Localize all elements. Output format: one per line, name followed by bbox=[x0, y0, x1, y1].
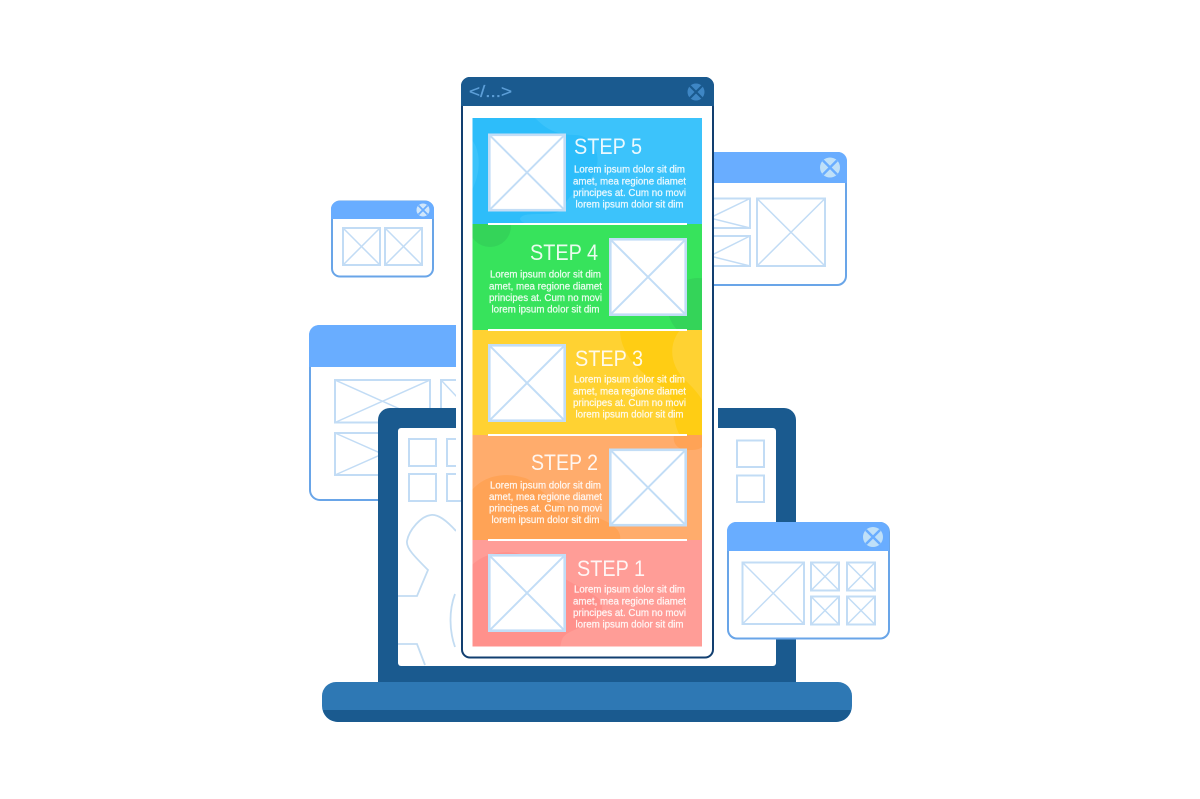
heading: STEP 3 bbox=[575, 346, 643, 371]
wireframe images bottom right window bbox=[742, 562, 875, 624]
text block: Lorem ipsum dolor sit dim bbox=[574, 374, 685, 386]
wireframe images top right window bbox=[714, 198, 826, 267]
text block: principes at. Cum no movi bbox=[573, 607, 686, 619]
text block bbox=[489, 268, 602, 316]
text block: amet, mea regione diamet bbox=[489, 491, 602, 503]
text block: Lorem ipsum dolor sit dim bbox=[574, 584, 685, 596]
panel: step 3 bbox=[472, 330, 702, 435]
white margin beside phone bbox=[456, 320, 718, 500]
image placeholder bbox=[489, 135, 565, 210]
heading: STEP 4 bbox=[530, 240, 598, 265]
text block: principes at. Cum no movi bbox=[489, 292, 602, 304]
panel: step 4 bbox=[472, 224, 702, 330]
heading: STEP 2 bbox=[531, 450, 598, 475]
icon: close top right window bbox=[820, 158, 840, 178]
text block: lorem ipsum dolor sit dim bbox=[576, 198, 684, 210]
text block: lorem ipsum dolor sit dim bbox=[492, 514, 600, 526]
heading: STEP 5 bbox=[574, 134, 642, 159]
text block: amet, mea regione diamet bbox=[573, 386, 686, 398]
image placeholder bbox=[610, 450, 686, 525]
panel: step 5 bbox=[472, 118, 702, 224]
text block bbox=[489, 480, 602, 526]
panel: step 2 bbox=[472, 435, 702, 540]
text block: Lorem ipsum dolor sit dim bbox=[574, 164, 685, 176]
text block: Lorem ipsum dolor sit dim bbox=[490, 480, 601, 492]
text block: amet, mea regione diamet bbox=[573, 596, 686, 608]
text block: lorem ipsum dolor sit dim bbox=[576, 618, 684, 630]
panel: step 1 bbox=[472, 540, 702, 647]
screen gear outline bbox=[398, 515, 456, 665]
text block bbox=[573, 374, 686, 420]
laptop bbox=[322, 408, 852, 722]
phone panel bbox=[461, 77, 728, 658]
window: small top left bbox=[331, 201, 434, 276]
image placeholder bbox=[489, 345, 565, 421]
text block: lorem ipsum dolor sit dim bbox=[492, 304, 600, 316]
text block: principes at. Cum no movi bbox=[489, 502, 602, 514]
text block bbox=[573, 164, 686, 210]
icon: phone close bbox=[688, 84, 704, 100]
text block: principes at. Cum no movi bbox=[573, 397, 686, 409]
laptop screen bezel bbox=[378, 408, 796, 684]
image placeholder bbox=[610, 239, 686, 315]
laptop base bbox=[322, 682, 852, 722]
window: large left bbox=[309, 325, 456, 501]
image placeholder bbox=[489, 555, 565, 631]
window: top right bbox=[714, 152, 847, 286]
text block: principes at. Cum no movi bbox=[573, 187, 686, 199]
text block: Lorem ipsum dolor sit dim bbox=[490, 268, 601, 280]
phone header bar bbox=[461, 77, 714, 106]
screen wireframe squares bbox=[409, 439, 764, 502]
window: bottom right bbox=[727, 522, 889, 638]
wireframe images large window bbox=[334, 379, 456, 476]
wireframe images small window bbox=[343, 228, 422, 265]
text block: amet, mea regione diamet bbox=[573, 176, 686, 188]
text block: lorem ipsum dolor sit dim bbox=[576, 408, 684, 420]
icon: close small window bbox=[416, 204, 430, 216]
text block bbox=[573, 584, 686, 630]
phone code tag: </...> bbox=[469, 82, 512, 101]
heading: STEP 1 bbox=[577, 556, 645, 581]
icon: close bottom right window bbox=[863, 527, 883, 547]
text block: amet, mea regione diamet bbox=[489, 280, 602, 292]
